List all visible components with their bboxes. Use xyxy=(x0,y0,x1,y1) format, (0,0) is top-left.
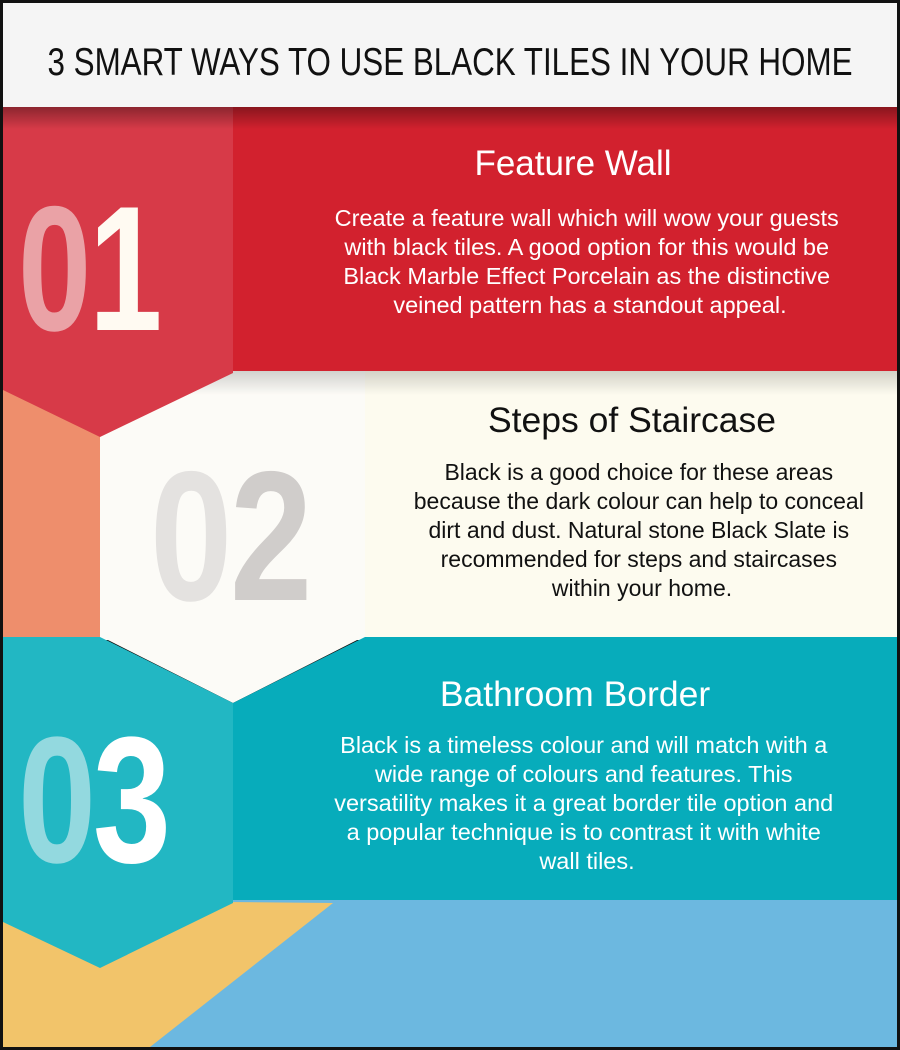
heading: Feature Wall: Feature Wall xyxy=(474,144,672,183)
number 01: 0 xyxy=(18,170,91,369)
panel 2 background xyxy=(100,370,897,703)
text: bathroom body: wide range of colours and features. This xyxy=(374,761,793,787)
number 03: 3 xyxy=(93,700,171,901)
text: staircase body: within your home. xyxy=(551,575,732,601)
number 01: 1 xyxy=(89,170,162,369)
text: staircase body: Black is a good choice for these areas xyxy=(444,459,833,485)
background: yellow xyxy=(3,900,333,1047)
panel 3: teal xyxy=(3,637,897,968)
number 01 xyxy=(18,170,162,369)
background: blue xyxy=(3,900,897,1047)
text: feature wall body: veined pattern has a standout appeal. xyxy=(393,292,787,318)
panel 1: red xyxy=(3,107,897,437)
heading: Steps of Staircase: Steps of Staircase xyxy=(488,400,776,440)
number 02 xyxy=(150,433,312,640)
text: bathroom body: a popular technique is to contrast it with white xyxy=(347,819,821,845)
heading: Bathroom Border: Bathroom Border xyxy=(440,674,710,714)
text: feature wall body: Create a feature wall which will wow your guests xyxy=(335,205,839,231)
number 03 xyxy=(18,700,171,901)
header xyxy=(3,3,897,107)
text: bathroom body: Black is a timeless colour and will match with a xyxy=(340,732,828,758)
text: bathroom body: versatility makes it a great border tile option and xyxy=(334,790,833,816)
text: bathroom body: wall tiles. xyxy=(538,848,635,874)
orange strip xyxy=(3,380,100,640)
text: feature wall body: Black Marble Effect Porcelain as the distinctive xyxy=(343,263,830,289)
text: staircase body: because the dark colour can help to conceal xyxy=(414,488,864,514)
number 02: 0 xyxy=(150,433,232,640)
text: staircase body: recommended for steps and staircases xyxy=(441,546,837,572)
text: feature wall body: with black tiles. A good option for this would be xyxy=(343,234,829,260)
panel 2 content xyxy=(150,400,870,640)
number 03: 0 xyxy=(18,700,96,901)
number 02: 2 xyxy=(230,433,312,640)
text: staircase body: dirt and dust. Natural stone Black Slate is xyxy=(428,517,849,543)
